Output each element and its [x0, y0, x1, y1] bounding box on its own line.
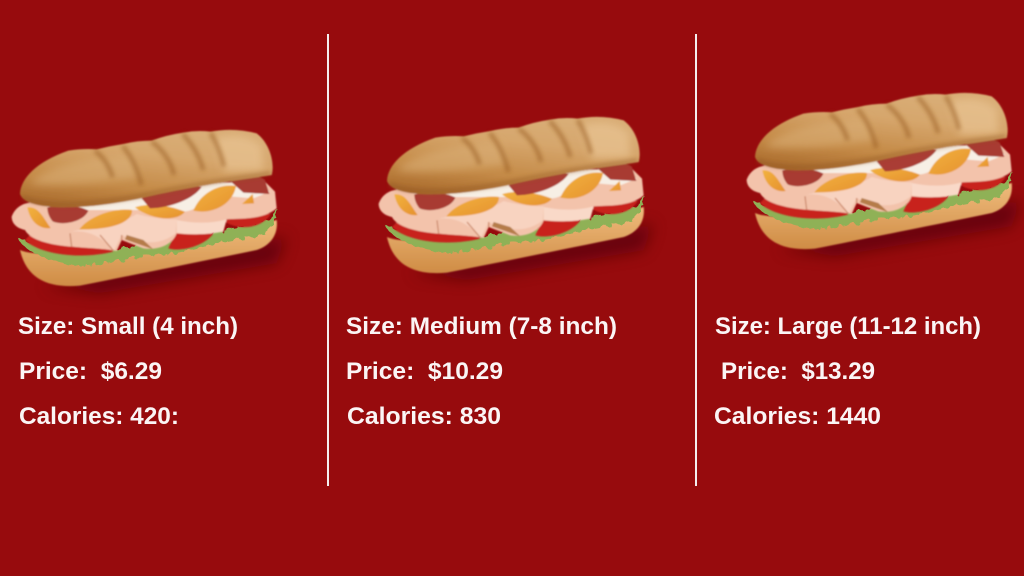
divider: right — [695, 34, 697, 486]
icon: large sandwich image — [746, 92, 1024, 263]
panel: small sandwich — [10, 128, 290, 430]
panel: medium sandwich — [346, 116, 656, 430]
panel: large sandwich — [714, 92, 1024, 430]
size: small: Size: Small (4 inch) — [18, 313, 238, 340]
medium sandwich details — [346, 313, 617, 430]
calories: large: Calories: 1440 — [714, 403, 881, 430]
large sandwich details — [714, 313, 981, 430]
divider: left — [327, 34, 329, 486]
calories: medium: Calories: 830 — [347, 403, 501, 430]
size: medium: Size: Medium (7-8 inch) — [346, 313, 617, 340]
size: large: Size: Large (11-12 inch) — [715, 313, 981, 340]
price: small: Price: $6.29 — [19, 358, 162, 385]
price: medium: Price: $10.29 — [346, 358, 503, 385]
icon: small sandwich image — [10, 128, 290, 300]
small sandwich details — [18, 313, 238, 430]
calories: small: Calories: 420: — [19, 403, 179, 430]
price: large: Price: $13.29 — [721, 358, 875, 385]
icon: medium sandwich image — [378, 116, 656, 287]
